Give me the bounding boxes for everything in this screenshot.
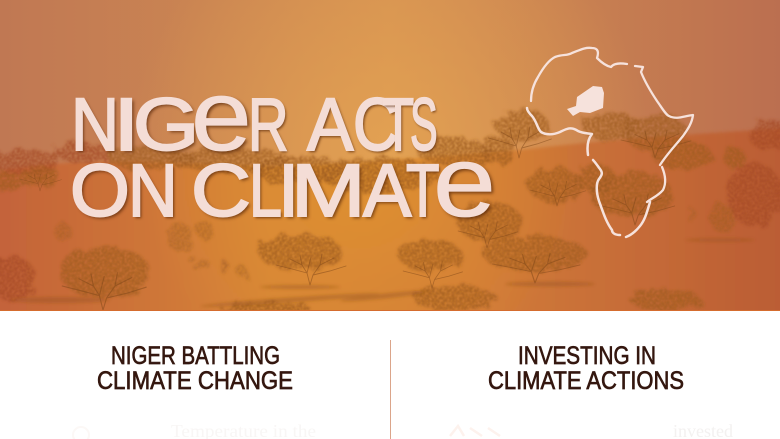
title: A bbox=[363, 149, 411, 232]
divider bbox=[390, 340, 391, 439]
title: I bbox=[278, 149, 299, 232]
map of Africa with Niger highlighted bbox=[526, 46, 694, 238]
title: T bbox=[382, 83, 414, 166]
title: C bbox=[353, 83, 399, 166]
ground shadows bbox=[10, 238, 755, 309]
title: O bbox=[70, 149, 130, 232]
title: N bbox=[128, 149, 178, 232]
heading: Investing in climate actions: CLIMATE ACTIONS bbox=[488, 367, 684, 395]
title bbox=[70, 60, 495, 238]
title: C bbox=[191, 149, 251, 232]
title: I bbox=[113, 83, 140, 166]
title: e bbox=[191, 60, 251, 172]
heading: Niger battling climate change: CLIMATE CHANGE bbox=[97, 367, 293, 395]
faded text and icon below left heading bbox=[73, 421, 316, 439]
Niger bbox=[567, 86, 604, 116]
heading: Investing in climate actions bbox=[488, 342, 684, 395]
heading: Niger battling climate change bbox=[97, 342, 293, 395]
title: T bbox=[406, 149, 439, 232]
title: S bbox=[410, 83, 438, 166]
heading: Investing in climate actions: INVESTING IN bbox=[518, 342, 656, 370]
Africa outline bbox=[527, 48, 693, 237]
tree line and shrubs bbox=[0, 109, 780, 314]
title: A bbox=[307, 83, 353, 166]
title: L bbox=[249, 149, 282, 232]
title: N bbox=[71, 83, 119, 166]
faded text and icon below right heading bbox=[450, 421, 733, 439]
title: e bbox=[432, 126, 495, 238]
title: M bbox=[291, 149, 365, 232]
sand dunes bbox=[0, 128, 780, 330]
heading: Niger battling climate change: NIGER BATTLING bbox=[111, 342, 280, 370]
title: G bbox=[133, 83, 199, 166]
tree trunks and branches bbox=[20, 127, 691, 310]
hero photo background: desert with acacia trees bbox=[0, 0, 780, 311]
title: R bbox=[248, 83, 289, 166]
